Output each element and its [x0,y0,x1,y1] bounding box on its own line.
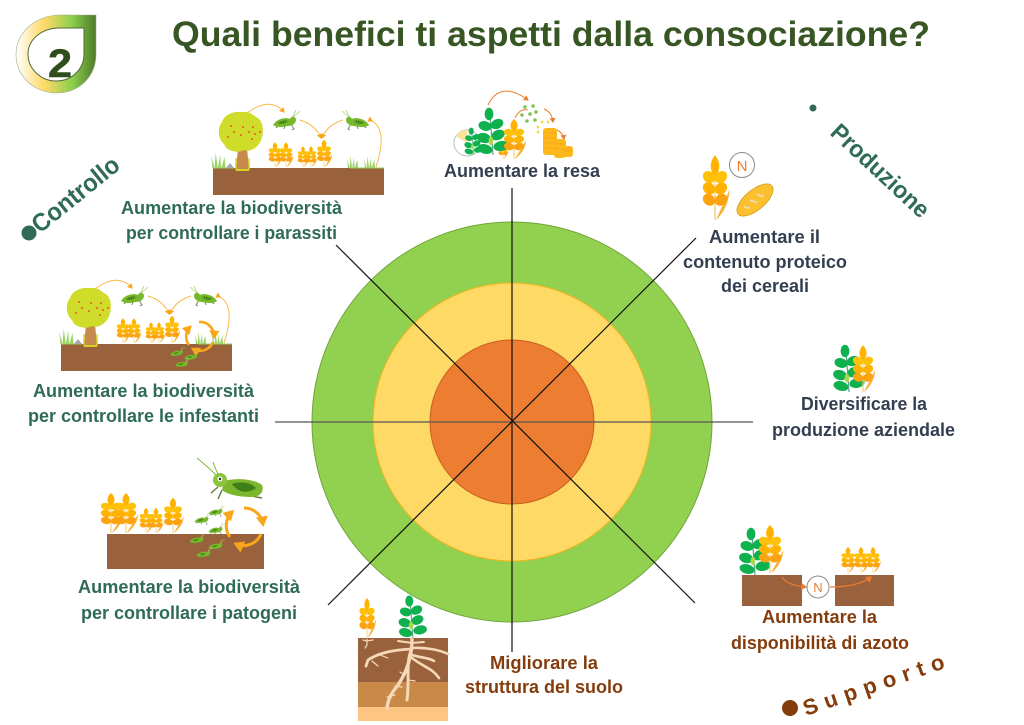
ring: inner orange [430,340,594,504]
text: suolo [465,653,623,697]
text: infestanti: Aumentare la biodiversità [33,381,255,401]
panel: azoto [731,525,909,653]
text: diversificare [772,394,955,440]
text: diversificare: produzione aziendale [772,420,955,440]
text: patogeni: Aumentare la biodiversità [78,577,301,597]
panel: aumentare la resa [444,91,601,181]
text: patogeni: per controllare i patogeni [81,603,297,623]
text: diversificare: Diversificare la [801,394,928,414]
text: azoto [731,607,909,653]
illustration: soil layers and roots [358,596,448,721]
panel: infestanti [28,280,259,426]
text: parassiti [121,198,343,243]
ring: outer green [312,222,712,622]
text: suolo: Migliorare la [490,653,599,673]
text: infestanti [28,381,259,426]
text: proteico: Aumentare il [709,227,820,247]
text: proteico [683,227,847,296]
text: resa: Aumentare la resa [444,161,601,181]
illustration: crops to coins [454,91,573,159]
illustration: nitrogen transfer [738,525,894,606]
illustration: wheat, nitrogen and bread [702,152,778,222]
illustration: orchard with weed cycle [59,280,232,371]
title: Quali benefici ti aspetti dalla consociazione? [172,15,930,54]
text: parassiti: per controllare i parassiti [126,223,337,243]
panel: struttura del suolo [358,596,623,721]
illustration: orchard with grasshoppers [211,104,384,195]
text: proteico: contenuto proteico [683,252,847,272]
category label: Controllo: Controllo [26,151,125,239]
ring: middle yellow [373,283,651,561]
radar axes [275,188,753,652]
text: suolo: struttura del suolo [465,677,623,697]
illustration: nitrogen transfer: N [813,580,823,595]
text: parassiti: Aumentare la biodiversità [121,198,343,218]
category label: Supporto: Supporto [799,649,948,721]
text: azoto: disponibilità di azoto [731,633,909,653]
illustration: wheat, soil and grasshopper cycle [100,458,264,569]
category label: Produzione: Produzione [825,119,935,224]
illustration: legume and wheat [832,345,875,393]
text: proteico: dei cereali [721,276,809,296]
text: azoto: Aumentare la [762,607,878,627]
text: patogeni [78,577,301,623]
panel: contenuto proteico [683,152,847,296]
panel: diversificare [772,345,955,440]
illustration: wheat, nitrogen and bread: N [737,158,747,175]
panel: parassiti [121,104,384,243]
text: infestanti: per controllare le infestanti [28,406,259,426]
icon: numbered badge 2 [16,15,96,93]
chart: concentric radar target [275,188,753,652]
icon: numbered badge 2: 2 [48,42,72,86]
panel: patogeni [78,458,301,623]
